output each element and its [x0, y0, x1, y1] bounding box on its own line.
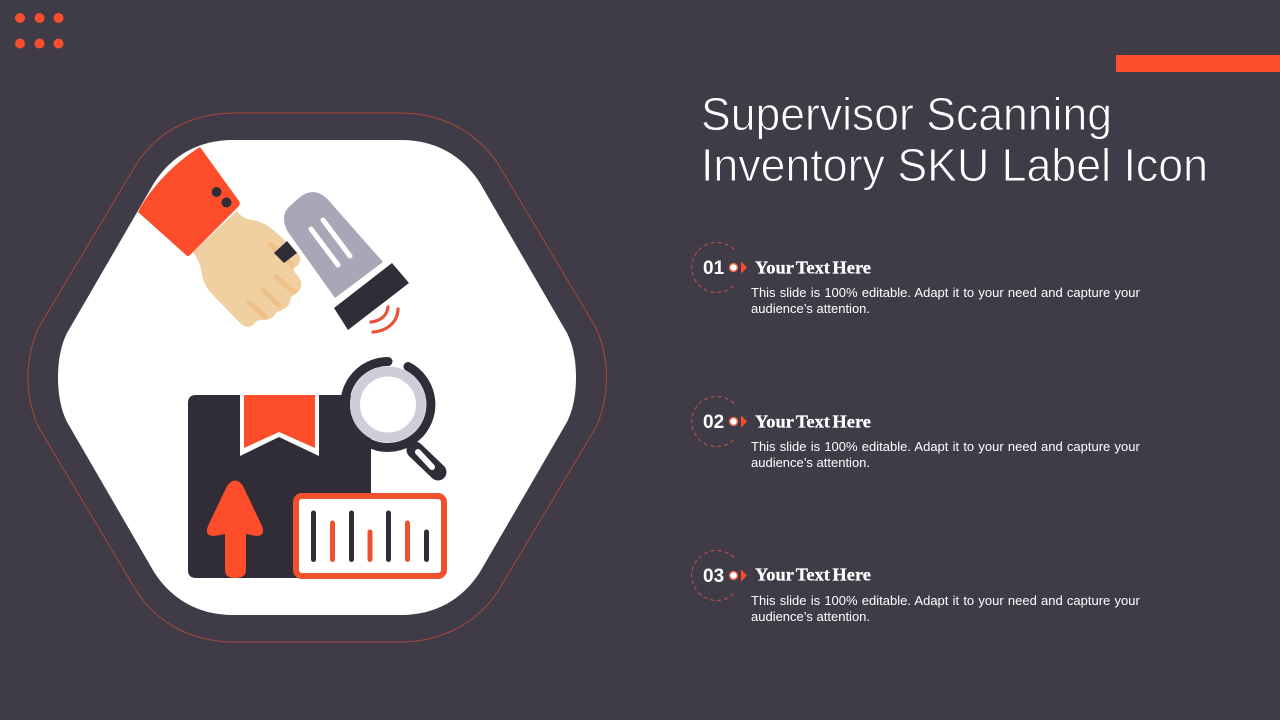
body 02: audience’s attention.	[751, 455, 870, 470]
lens ring	[355, 372, 421, 438]
body 02	[751, 439, 1140, 470]
item 02	[692, 397, 1140, 470]
heading 02: Your Text Here	[755, 412, 871, 432]
scanner body	[284, 192, 383, 298]
marker 01	[692, 243, 747, 292]
title: Inventory SKU Label Icon	[701, 139, 1208, 191]
marker 03: 03	[703, 566, 724, 587]
title	[701, 88, 1208, 191]
hexagon outline	[28, 113, 606, 642]
scanner head	[334, 263, 409, 330]
marker 02: 02	[703, 412, 724, 433]
hand	[193, 211, 301, 327]
white hexagon panel	[58, 140, 576, 615]
dark rim	[345, 361, 431, 447]
body 01	[751, 285, 1140, 316]
box body	[188, 395, 371, 578]
ring	[274, 241, 297, 263]
heading 01: Your Text Here	[755, 258, 871, 278]
box label ribbon	[240, 395, 319, 456]
scanner highlights	[311, 220, 350, 265]
up arrow	[207, 480, 263, 578]
finger creases	[249, 244, 294, 317]
decorative dot grid	[15, 13, 64, 48]
sleeve cuff	[138, 147, 240, 256]
marker 01: 01	[703, 258, 725, 279]
body 03	[751, 593, 1140, 624]
body 03: audience’s attention.	[751, 609, 870, 624]
body 02: This slide is 100% editable. Adapt it to your need and capture your	[751, 439, 1140, 454]
accent bar	[1116, 55, 1280, 72]
icon: barcode label	[296, 496, 444, 576]
cuff buttons	[212, 187, 222, 197]
heading 03: Your Text Here	[755, 564, 871, 584]
marker 03	[692, 550, 747, 600]
body 01: audience’s attention.	[751, 301, 870, 316]
item 03	[692, 550, 1140, 624]
body 01: This slide is 100% editable. Adapt it to your need and capture your	[751, 285, 1140, 300]
icon: hand holding scanner	[138, 147, 409, 332]
icon: package box	[188, 395, 371, 578]
icon: magnifying glass	[345, 361, 438, 472]
lens backing	[350, 366, 426, 442]
scan waves	[371, 307, 398, 332]
handle	[415, 450, 438, 472]
item 01	[692, 243, 1140, 316]
title: Supervisor Scanning	[701, 88, 1112, 140]
marker 02	[692, 397, 747, 446]
body 03: This slide is 100% editable. Adapt it to your need and capture your	[751, 593, 1140, 608]
